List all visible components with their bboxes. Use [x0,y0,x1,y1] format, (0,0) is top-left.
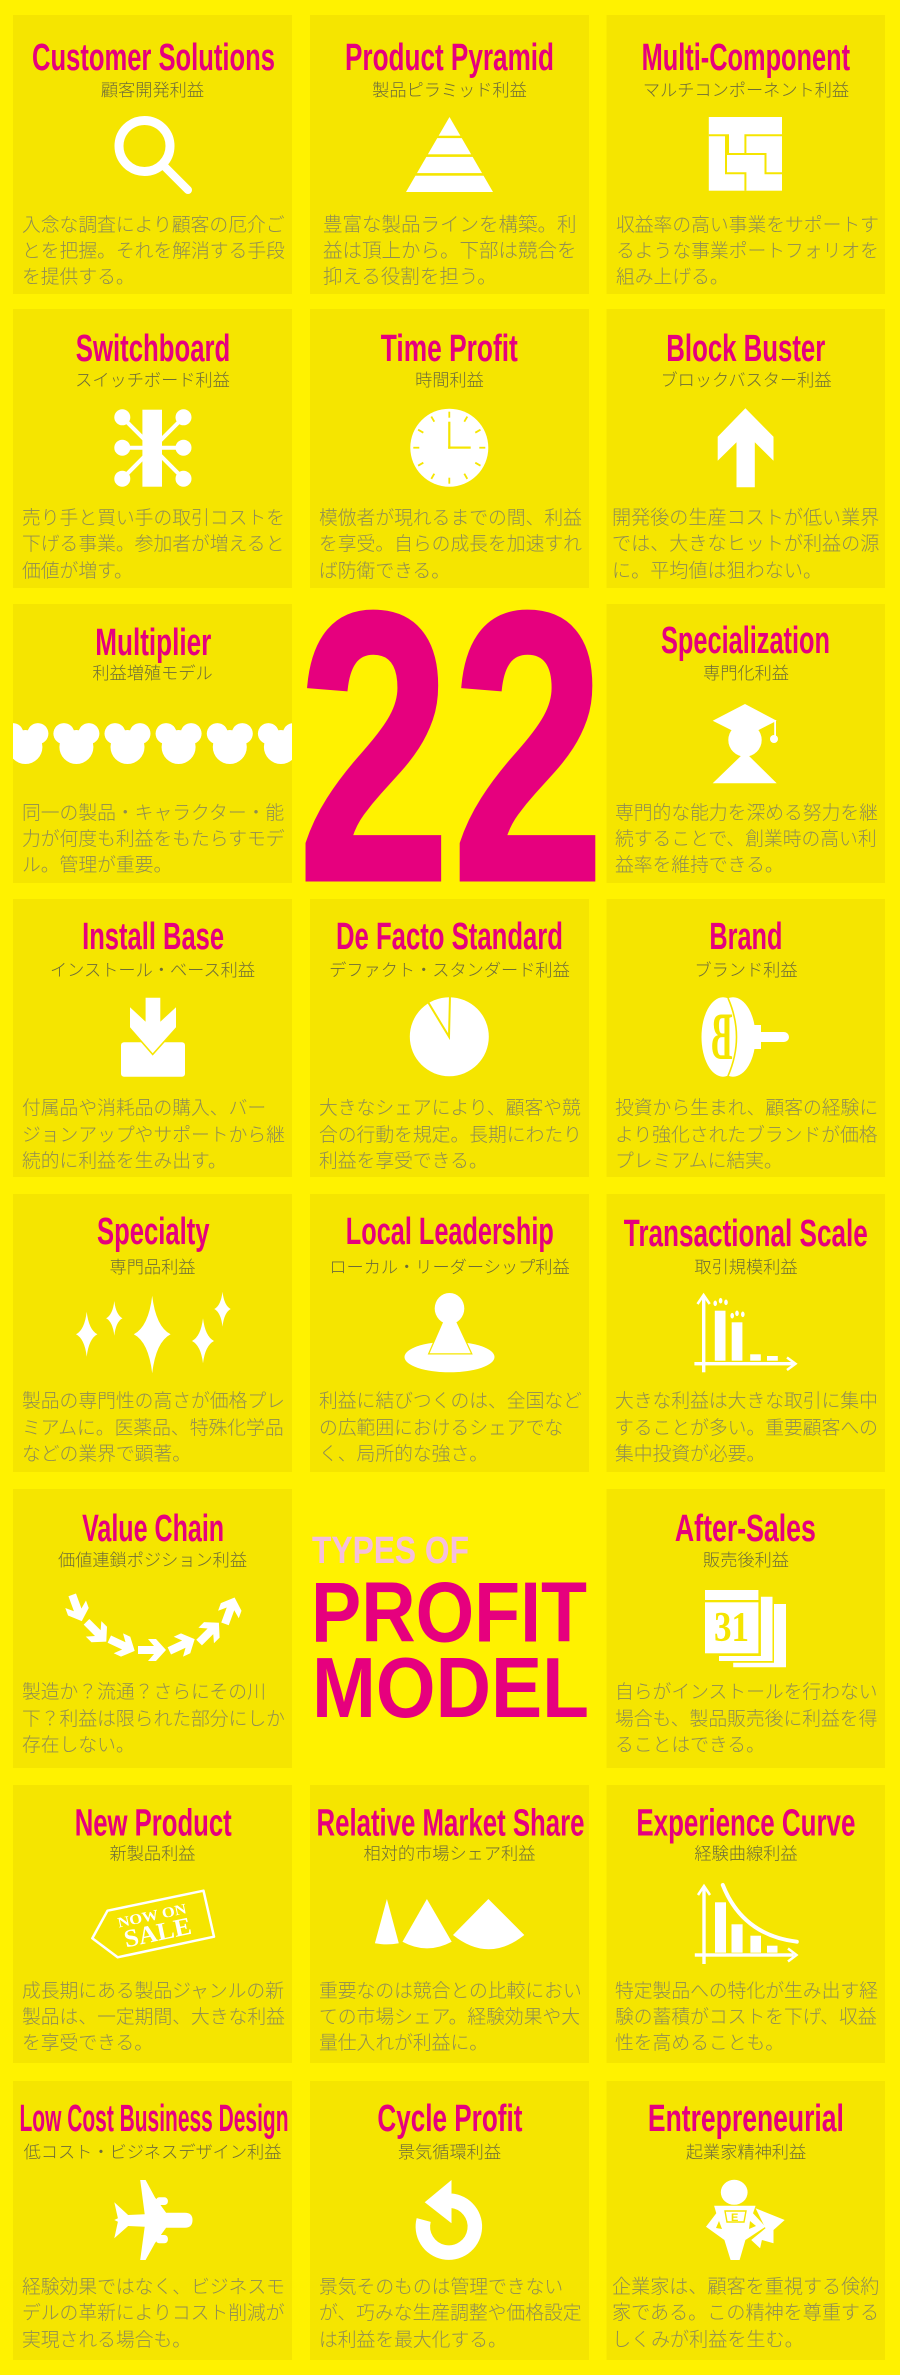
description: などの業界で顕著。 [22,1443,191,1464]
description: 存在しない。 [22,1734,135,1755]
icon: install box with arrow [121,998,185,1077]
panel: Time Profit [310,309,589,588]
icon: sparkles [76,1292,231,1373]
description [22,1681,285,1755]
icon: bar chart with sparks [694,1295,796,1372]
panel: New Product [13,1785,292,2063]
description: 量仕入れが利益に。 [319,2032,488,2053]
title: Relative Market Share [316,1802,584,1844]
subtitle: 利益増殖モデル [92,663,213,683]
icon: switchboard [114,409,192,487]
description: 験の蓄積がコストを下げ、収益 [615,2006,877,2027]
icon: clock [410,409,488,487]
description [615,1097,878,1171]
subtitle: 販売後利益 [703,1550,789,1570]
panel: Low Cost Business Design [13,2081,292,2360]
description: 益率を維持できる。 [615,854,784,875]
description: るような事業ポートフォリオを [616,240,879,261]
title: New Product [75,1802,232,1844]
subtitle: 取引規模利益 [694,1257,798,1277]
subtitle: 景気循環利益 [398,2142,501,2162]
subtitle: 新製品利益 [110,1844,195,1864]
heading line: profit: PROFIT [311,1565,587,1660]
description [319,1390,582,1464]
panel: Cycle Profit [310,2081,589,2360]
description: とを把握。それを解消する手段 [22,240,285,261]
description: 大きな利益は大きな取引に集中 [615,1390,878,1411]
description [616,214,879,287]
icon: sale tag: NOW ON [116,1901,189,1932]
subtitle: 経験曲線利益 [694,1844,798,1864]
panel: Relative Market Share [310,1785,589,2063]
title: Low Cost Business Design [20,2097,288,2139]
title: After-Sales [675,1507,816,1549]
description: は利益を最大化する。 [319,2329,507,2350]
description: しくみが利益を生む。 [612,2329,804,2351]
panel: Install Base [13,899,292,1177]
description: では、大きなヒットが利益の源 [612,533,879,555]
description: 製造か？流通？さらにその川 [22,1681,266,1702]
description: 入念な調査により顧客の厄介ご [22,214,285,235]
description [612,2276,879,2351]
description: することが多い。重要顧客への [615,1417,878,1438]
description: く、局所的な強さ。 [319,1443,488,1464]
panel: Switchboard [13,309,292,588]
description: 重要なのは競合との比較におい [319,1980,582,2001]
description: 合の行動を規定。長期にわたり [319,1124,582,1145]
description: 投資から生まれ、顧客の経験に [615,1097,878,1118]
description [319,1980,582,2053]
icon: chain of arrows [62,1591,245,1661]
panel: Customer Solutions [13,15,292,294]
description [319,2276,582,2350]
icon: repeating character heads [2,723,304,764]
title: Cycle Profit [377,2097,523,2139]
title: Block Buster [666,327,826,369]
description: 力が何度も利益をもたらすモデ [22,828,285,849]
description: ジョンアップやサポートから継 [22,1124,285,1145]
description: が、巧みな生産調整や価格設定 [319,2302,582,2323]
panel: Specialty [13,1194,292,1472]
icon: brand stamp [702,997,789,1077]
description: 組み上げる。 [616,266,729,287]
subtitle: ブランド利益 [694,960,798,980]
description: 付属品や消耗品の購入、バー [22,1097,266,1118]
description: ば防衛できる。 [319,560,450,581]
icon: pyramid [400,117,500,192]
title: Switchboard [76,327,230,369]
description: 抑える役割を担う。 [323,266,497,288]
subtitle: 相対的市場シェア利益 [364,1844,535,1864]
icon: pie chart [410,995,489,1076]
subtitle: 顧客開発利益 [101,80,204,100]
description: 下？利益は限られた部分にしか [22,1708,285,1729]
subtitle: ローカル・リーダーシップ利益 [329,1257,570,1277]
icon: pawn on base [404,1293,494,1372]
description [22,1390,285,1464]
icon: airplane [114,2180,192,2260]
panel: Value Chain [13,1489,292,1768]
description: 下げる事業。参加者が増えると [22,533,284,554]
subtitle: デファクト・スタンダード利益 [329,960,570,980]
panel: Brand [606,899,885,1177]
description: 家である。この精神を尊重する [612,2302,879,2324]
description [615,1980,878,2053]
description: 大きなシェアにより、顧客や競 [319,1097,581,1118]
description: 製品は、一定期間、大きな利益 [22,2006,285,2027]
icon: sale tag [92,1891,214,1957]
subtitle: 起業家精神利益 [686,2142,806,2162]
title: Local Leadership [346,1210,554,1252]
icon: puzzle blocks [709,117,782,191]
panel: Product Pyramid [310,15,589,294]
description: 利益を享受できる。 [319,1150,488,1171]
description: 自らがインストールを行わない [615,1681,878,1702]
panel: Local Leadership [310,1194,589,1472]
description: 成長期にある製品ジャンルの新 [22,1980,284,2001]
subtitle: インストール・ベース利益 [50,960,255,980]
icon: brand stamp: B [711,1000,733,1074]
description [615,1390,878,1464]
title: Specialty [97,1210,210,1252]
description: 利益に結びつくのは、全国など [319,1390,582,1411]
description [22,1097,285,1171]
description: 集中投資が必要。 [615,1443,765,1464]
description: より強化されたブランドが価格 [615,1124,878,1145]
description: を享受。自らの成長を加速すれ [319,533,582,554]
icon: sale tag: SALE [122,1913,194,1953]
description: 特定製品への特化が生み出す経 [615,1980,878,2001]
icon: magnifying glass [119,120,188,190]
subtitle: 製品ピラミッド利益 [372,80,527,100]
description: 企業家は、顧客を重視する倹約 [612,2276,879,2298]
panel: Entrepreneurial [606,2081,885,2360]
description: 価値が増す。 [22,560,133,581]
description: 専門的な能力を深める努力を継 [615,802,878,823]
description [22,214,285,287]
panel: Experience Curve [606,1785,885,2063]
description: を提供する。 [22,266,135,287]
icon: entrepreneur hero [706,2180,785,2260]
title: Brand [709,915,782,957]
description [323,214,577,288]
description: 売り手と買い手の取引コストを [22,507,285,528]
description: デルの革新によりコスト削減が [22,2302,285,2323]
description: 実現される場合も。 [22,2329,191,2350]
description: 続的に利益を生み出す。 [22,1150,227,1171]
subtitle: 専門品利益 [110,1257,195,1277]
description: 開発後の生産コストが低い業界 [612,507,879,529]
description [22,507,285,581]
panel: Block Buster [606,309,885,588]
heading line: types of: TYPES OF [312,1529,469,1571]
description: 同一の製品・キャラクター・能 [22,802,284,823]
description: 製品の専門性の高さが価格プレ [22,1390,285,1411]
title: Product Pyramid [345,36,554,78]
subtitle: マルチコンポーネント利益 [643,80,849,100]
description [319,1097,582,1171]
icon: calendar [705,1590,786,1667]
description: 模倣者が現れるまでの間、利益 [319,507,582,528]
description [22,1980,285,2053]
icon: calendar: 31 [714,1605,749,1651]
subtitle: 専門化利益 [703,663,789,683]
description: 景気そのものは管理できない [319,2276,563,2297]
icon: entrepreneur hero: E [731,2212,738,2224]
subtitle: 時間利益 [415,370,484,390]
panel: Specialization [606,604,885,883]
heading line: model: MODEL [312,1641,589,1736]
title: Customer Solutions [32,36,275,78]
description [22,2276,285,2350]
subtitle: 価値連鎖ポジション利益 [58,1550,247,1570]
panel: Multi-Component [606,15,885,294]
title: Time Profit [381,327,518,369]
description [615,802,878,875]
title: Install Base [82,915,224,957]
description: ミアムに。医薬品、特殊化学品 [22,1417,284,1438]
description: プレミアムに結実。 [615,1150,783,1171]
icon: up arrow [718,408,774,487]
subtitle: 低コスト・ビジネスデザイン利益 [24,2142,281,2162]
icon: cycle arrow [423,2180,475,2253]
description [319,507,582,581]
big number 22: 22 [297,532,605,963]
title: Multiplier [95,621,212,663]
description: 豊富な製品ラインを構築。利 [323,214,577,236]
icon: graduate [713,704,778,783]
subtitle: ブロックバスター利益 [660,370,832,390]
heading: types of profit model [311,1529,589,1736]
description: 続することで、創業時の高い利 [615,828,877,849]
title: Value Chain [82,1507,224,1549]
description: の広範囲におけるシェアでな [319,1417,563,1438]
panel: De Facto Standard [310,899,589,1177]
title: De Facto Standard [336,915,563,957]
description: 益は頂上から。下部は競合を [323,240,577,262]
description: ての市場シェア。経験効果や大 [319,2006,580,2027]
description [22,802,285,875]
icon: experience curve chart [695,1885,797,1964]
panel: Multiplier [2,604,304,883]
panel: Transactional Scale [606,1194,885,1472]
description: 収益率の高い事業をサポートす [616,214,879,235]
subtitle: スイッチボード利益 [75,370,230,390]
description: に。平均値は狙わない。 [612,560,822,582]
description: を享受できる。 [22,2032,153,2053]
description: ル。管理が重要。 [22,854,172,875]
description [615,1681,878,1755]
icon: pie slices [375,1899,524,1949]
description: ることはできる。 [615,1734,765,1755]
description: 経験効果ではなく、ビジネスモ [22,2276,285,2297]
description [612,507,879,582]
panel: After-Sales [606,1489,885,1768]
description: 性を高めることも。 [615,2032,784,2053]
description: 場合も、製品販売後に利益を得 [615,1708,877,1729]
